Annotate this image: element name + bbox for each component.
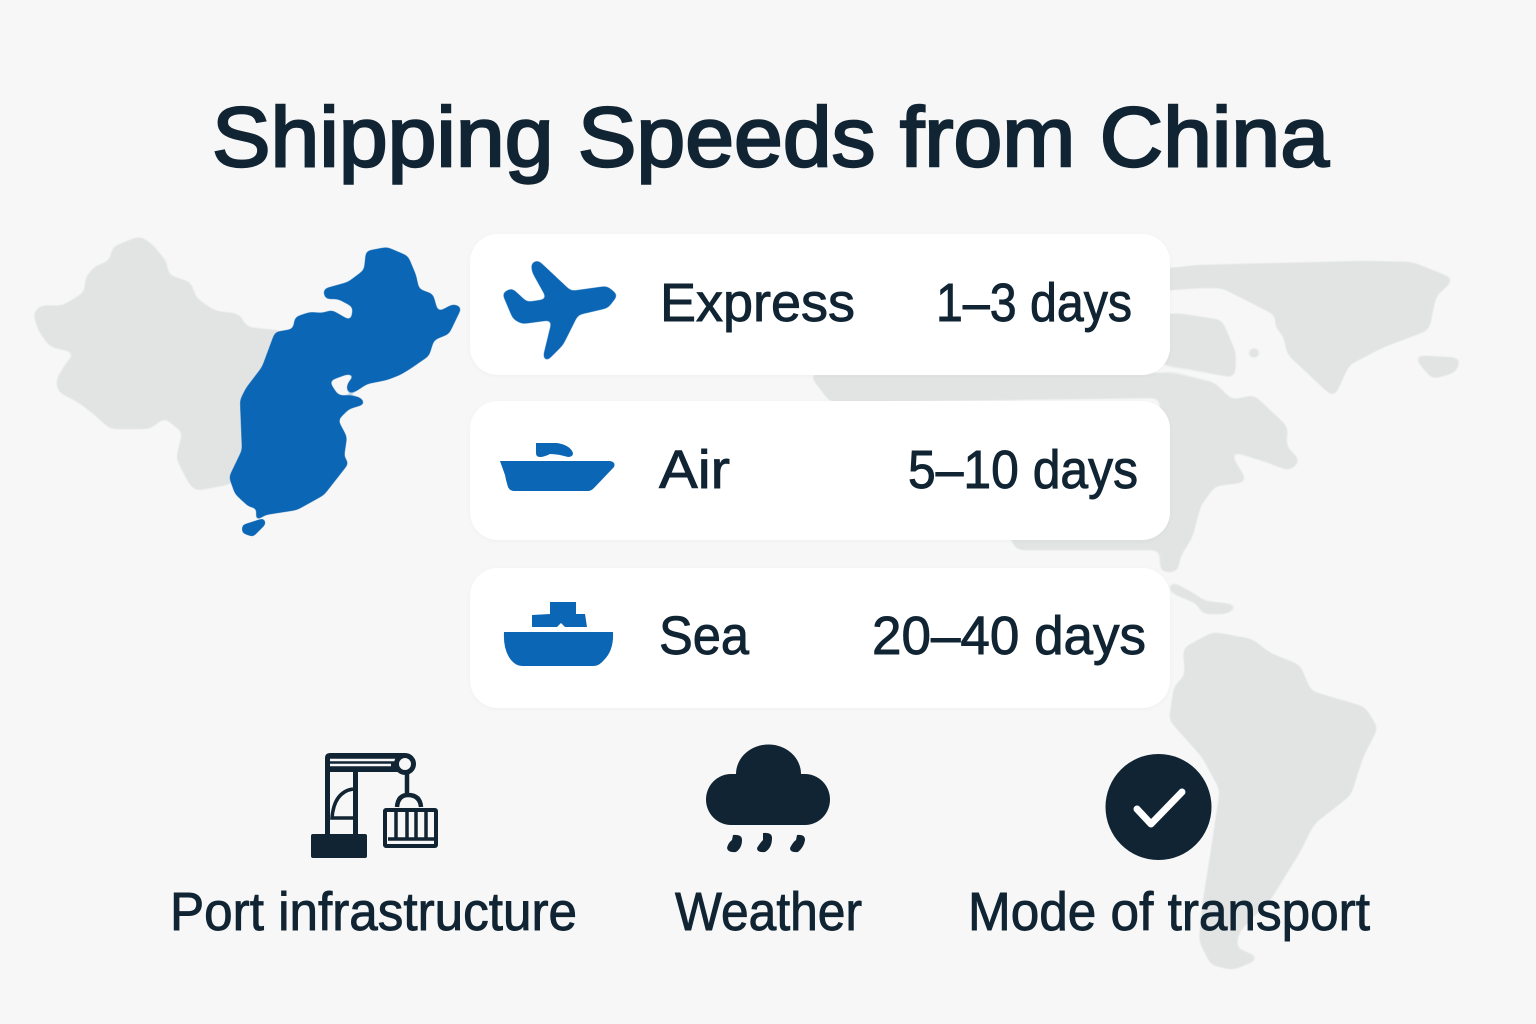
map: highlighted eastern China (229, 247, 462, 537)
label: Express: Express (660, 273, 855, 333)
crane beam (325, 753, 405, 838)
map: small island (1247, 347, 1261, 359)
boat cabin (536, 443, 573, 457)
eastern China mainland (229, 247, 462, 522)
map: western China (33, 236, 285, 491)
icon: check circle (1106, 754, 1212, 860)
label: Sea: Sea (659, 606, 750, 666)
ship hull (504, 632, 613, 666)
value: 1–3 days: 1–3 days (936, 273, 1132, 333)
world map background (33, 236, 1462, 970)
crane beam highlights (330, 760, 398, 765)
map: east island (1412, 355, 1462, 379)
icon: port crane (311, 753, 436, 858)
raindrops (727, 833, 805, 852)
cloud (706, 744, 830, 825)
label: port infrastructure: Port infrastructure (170, 882, 577, 942)
shipping container (385, 810, 436, 846)
crane pulley (396, 756, 414, 772)
card: air (470, 401, 1170, 540)
icon: plane (502, 260, 618, 362)
card: sea (470, 568, 1170, 708)
map: South America (1169, 632, 1378, 970)
crane hook (397, 773, 421, 807)
map: central landmass (1160, 313, 1236, 378)
map: Central America (808, 373, 1301, 572)
label: weather: Weather (675, 882, 862, 942)
boat hull (500, 461, 614, 491)
container ribs (388, 811, 434, 839)
card: express (470, 234, 1170, 375)
title: Shipping Speeds from China (212, 90, 1329, 184)
crane base (311, 834, 367, 858)
crane left post gap (330, 772, 353, 834)
value: 5–10 days: 5–10 days (908, 440, 1138, 500)
check mark (1137, 792, 1182, 824)
map: Caribbean islands (1169, 580, 1242, 614)
panel: speed rows (470, 234, 1170, 708)
crane arc (332, 789, 353, 818)
label: Air: Air (659, 440, 730, 500)
crane second post (353, 772, 358, 836)
circle (1106, 754, 1212, 860)
icon: cargo ship (504, 602, 613, 666)
icon: rain cloud (706, 744, 830, 852)
value: 20–40 days: 20–40 days (872, 606, 1146, 666)
ship superstructure (532, 602, 587, 627)
map: North America north (1160, 261, 1455, 398)
label: mode of transport: Mode of transport (968, 882, 1370, 942)
icon: speed boat (500, 443, 614, 491)
Hainan island (242, 518, 266, 537)
